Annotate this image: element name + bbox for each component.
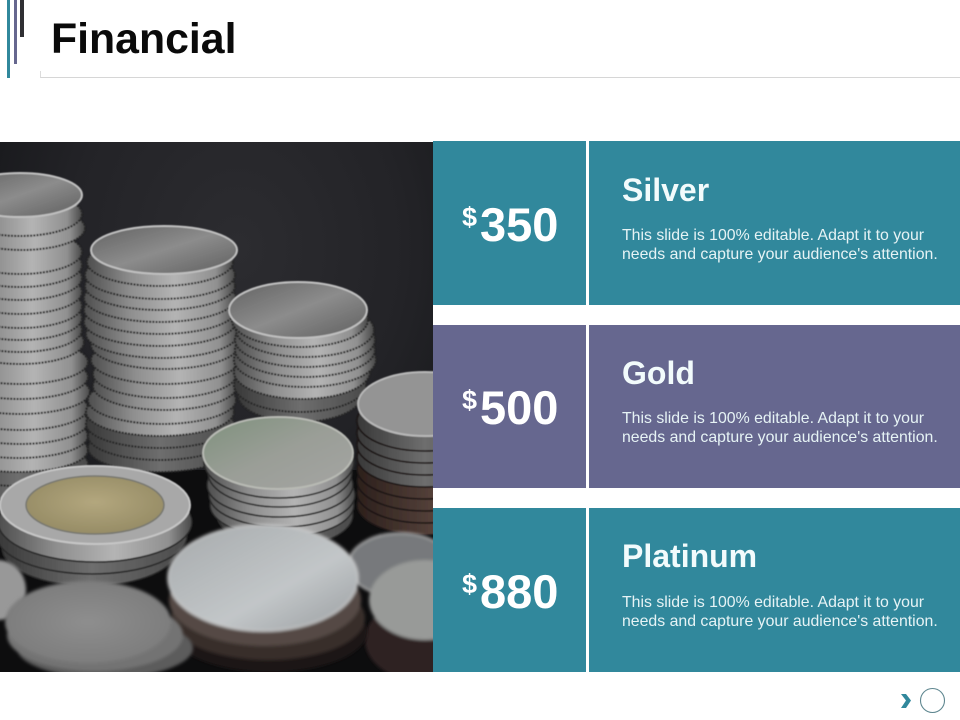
panel: platinum price xyxy=(433,508,586,672)
heading: Silver: Silver xyxy=(622,172,709,208)
gold-centre bimetal coin stack xyxy=(0,466,192,586)
photo: stacks of coins xyxy=(0,142,433,672)
price: 880: $880 xyxy=(462,565,558,618)
coin stack: right foreground xyxy=(348,533,485,682)
panel: gold details xyxy=(589,325,960,488)
description: Gold: needs and capture your audience's attention. xyxy=(622,429,938,446)
icon: circle button xyxy=(920,688,945,713)
header rule xyxy=(40,71,960,78)
coin stack: right of centre xyxy=(229,282,376,422)
description: Platinum: This slide is 100% editable. Adapt it to your xyxy=(622,594,924,611)
icon: next chevron xyxy=(901,694,911,708)
blurred coin stack, front left xyxy=(5,581,193,678)
description: Gold xyxy=(622,410,938,446)
panel: platinum details xyxy=(589,508,960,672)
photo backdrop xyxy=(0,142,433,672)
panel: silver details xyxy=(589,141,960,305)
title: Financial xyxy=(51,15,237,63)
description: Platinum xyxy=(622,594,938,630)
description: Gold: This slide is 100% editable. Adapt it to your xyxy=(622,410,924,427)
blurred bright coin stack, foreground xyxy=(168,525,367,672)
panel: gold price xyxy=(433,325,586,488)
heading: Gold: Gold xyxy=(622,355,695,391)
panel: silver price xyxy=(433,141,586,305)
heading: Platinum: Platinum xyxy=(622,538,757,574)
price: 500: $500 xyxy=(462,381,558,434)
coin stack: far right with copper edges xyxy=(357,372,493,535)
description: Silver: needs and capture your audience's attention. xyxy=(622,246,938,263)
coin stack: far left xyxy=(0,173,90,500)
green-tinted coin stack xyxy=(203,417,355,547)
header accent bars xyxy=(7,0,24,78)
coin: partly visible left edge xyxy=(0,560,26,620)
description: Platinum: needs and capture your audience's attention. xyxy=(622,613,938,630)
price: 350: $350 xyxy=(462,198,558,251)
coin stack: tall centre xyxy=(84,226,239,472)
description: Silver xyxy=(622,227,938,263)
description: Silver: This slide is 100% editable. Adapt it to your xyxy=(622,227,924,244)
